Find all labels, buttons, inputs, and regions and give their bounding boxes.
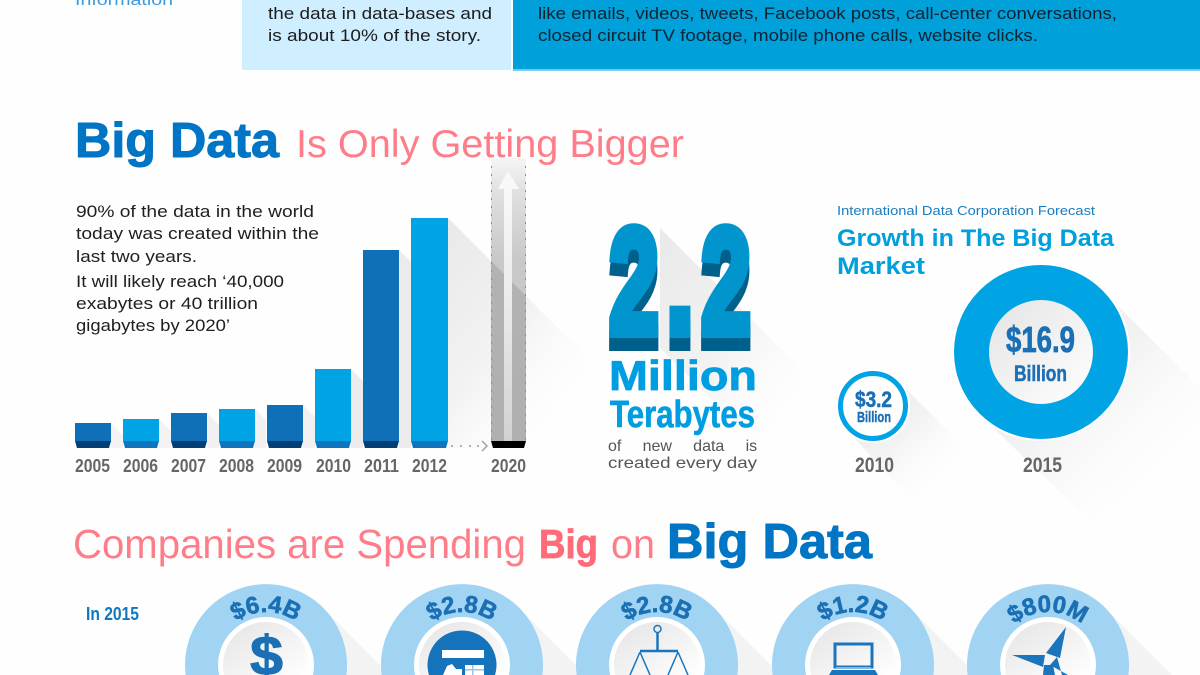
bar: 2007 [171, 413, 207, 448]
axis labels: years: 2007 [171, 456, 206, 476]
axis labels: years: 2020 [491, 456, 526, 476]
number: 2.2 [609, 197, 751, 378]
bar: 2012 [411, 218, 448, 448]
panel: unstructured data [513, 0, 1200, 71]
heading: growth in the big data market [837, 225, 1115, 280]
amount: $1.2B: $1.2B [817, 596, 888, 620]
spending circle: 2.8B infrastructure [381, 584, 576, 675]
number: 2.2: 2 [609, 210, 659, 378]
text: structured data description: the data in data-bases and [268, 5, 492, 23]
label: million: Million [609, 352, 757, 399]
axis labels: years: 2005 [75, 456, 110, 476]
amount: $2.8B: $2.8B [426, 596, 497, 620]
text: unstructured data description [538, 5, 1117, 45]
heading: big data is only getting bigger: Is Only Getting Bigger [296, 123, 684, 166]
caption: new data every day: created every day [608, 455, 757, 472]
bar: 2005 [75, 423, 111, 448]
number: 2.2: 2 [609, 197, 659, 365]
arrow: dotted connector to 2020 [451, 441, 487, 451]
bar: 2011 [363, 250, 399, 448]
label: terabytes: Terabytes [610, 394, 755, 436]
spending circle: 2.8B justice [576, 584, 772, 675]
caption: new data every day: of new data is [608, 438, 757, 455]
axis labels: years: 2010 [316, 456, 351, 476]
text: forecast source: International Data Corporation Forecast [837, 204, 1096, 218]
heading: companies are spending big on big data: Big [539, 521, 598, 567]
heading: growth in the big data market: Growth in The Big Data [837, 225, 1115, 252]
icon: balance scale [630, 626, 688, 675]
text: data growth statement: It will likely reach ‘40,000 [76, 273, 284, 291]
text: data growth statement [76, 203, 319, 335]
text: structured data description: is about 10% of the story. [268, 27, 481, 45]
text: structured data description [268, 5, 492, 45]
chart: 2015 circle: Billion [1014, 361, 1067, 386]
axis labels: years: 2012 [412, 456, 447, 476]
heading: growth in the big data market: Market [837, 253, 925, 280]
amount: $2.8B: $2.8B [621, 596, 692, 620]
chart: 2010 circle [836, 369, 910, 443]
heading: big data is only getting bigger [75, 114, 684, 168]
icon: wind turbine [1012, 627, 1068, 675]
bar chart: data volume 2005 to 2020 [75, 158, 640, 476]
bar: 2020 projected column with arrow [491, 158, 526, 448]
axis labels: years: 2009 [267, 456, 302, 476]
spending circle: 6.4B [185, 584, 382, 675]
heading: companies are spending big on big data: Big Data [667, 515, 873, 569]
number: 2.2: 2 [701, 210, 751, 378]
text: data growth statement: today was created within the [76, 225, 319, 243]
text: unstructured data description: closed circuit TV footage, mobile phone calls, website clicks. [538, 27, 1038, 45]
axis labels: years: 2008 [219, 456, 254, 476]
number: 2.2: . [666, 197, 694, 365]
bar: 2010 [315, 369, 351, 448]
chart: 2010 circle: $3.2 [855, 387, 892, 412]
caption: new data every day [608, 438, 757, 472]
bar: 2008 [219, 409, 255, 448]
bar: 2006 [123, 419, 159, 448]
spending circle: 1.2B technology [772, 584, 968, 675]
text: data growth statement: gigabytes by 2020’ [76, 317, 230, 335]
axis labels: years [75, 456, 526, 476]
amount: $6.4B: $6.4B [230, 596, 301, 620]
spending circle: 800M energy [967, 584, 1172, 675]
number: 2.2: . [666, 210, 694, 378]
panel: structured data [242, 0, 511, 70]
heading: companies are spending big on big data: on [611, 521, 655, 567]
label: 2010: 2010 [855, 454, 894, 477]
number: 2.2: 2 [701, 197, 751, 365]
icon: buildings [427, 630, 496, 675]
chart: 2010 circle: Billion [857, 409, 891, 426]
bar: 2009 [267, 405, 303, 448]
icon: laptop [829, 644, 878, 675]
amount: $800M: $800M [1007, 595, 1090, 623]
chart: 2015 circle [952, 263, 1130, 441]
heading: companies are spending big on big data: Companies are Spending [73, 521, 526, 567]
heading: companies are spending big on big data [73, 515, 873, 569]
label: in 2015: In 2015 [86, 604, 139, 624]
label: 2015: 2015 [1023, 454, 1062, 477]
panel: market growth forecast [836, 204, 1200, 540]
axis labels: years: 2006 [123, 456, 158, 476]
text: data growth statement: exabytes or 40 trillion [76, 295, 258, 313]
stat: 2.2 million terabytes [608, 197, 850, 478]
text: data growth statement: 90% of the data in the world [76, 203, 314, 221]
text: unstructured data description: like emails, videos, tweets, Facebook posts, call-center conversations, [538, 5, 1117, 23]
chart: 2015 circle: $16.9 [1006, 319, 1075, 360]
heading: big data is only getting bigger: Big Data [75, 114, 280, 168]
axis labels: years: 2011 [364, 456, 399, 476]
text: data growth statement: last two years. [76, 248, 197, 266]
